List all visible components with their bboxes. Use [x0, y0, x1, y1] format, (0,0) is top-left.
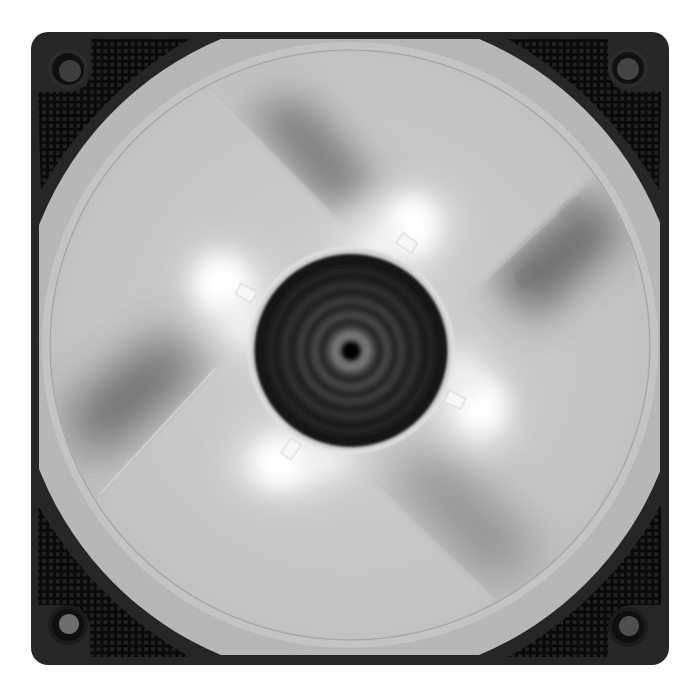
screw hole: bottom right [608, 607, 648, 647]
textured corner pad: top right [508, 39, 661, 190]
screw hole: bottom left [48, 605, 88, 645]
screw hole: top left [48, 49, 88, 89]
blade edge highlight: top left [241, 123, 330, 212]
blade shadow: top left [245, 100, 378, 210]
central motor hub [254, 254, 448, 447]
blade shadow: bottom right [385, 450, 545, 590]
textured corner pad: bottom left [38, 505, 190, 657]
textured corner pad: bottom right [508, 505, 661, 657]
blade shadow: top right [490, 190, 625, 322]
textured corner pad: top left [38, 39, 190, 190]
LED glow: top right [317, 169, 473, 307]
blade edge highlight: bottom left [100, 368, 216, 494]
blade slot: top right upper [560, 197, 578, 212]
blade slot: top right lower [517, 278, 518, 280]
LED glow: bottom [222, 407, 370, 509]
screw hole: top right [608, 48, 648, 88]
silver outer ring [39, 39, 660, 655]
hub halo [249, 248, 453, 452]
translucent blade disk [51, 51, 649, 639]
LED glow: right [403, 328, 533, 472]
centre spindle hole [345, 345, 357, 357]
blade edge highlight: top right [501, 197, 574, 266]
blade shadow: bottom left [65, 332, 205, 462]
blade edge highlight: bottom right [360, 470, 492, 598]
LED glow: left [167, 226, 303, 374]
